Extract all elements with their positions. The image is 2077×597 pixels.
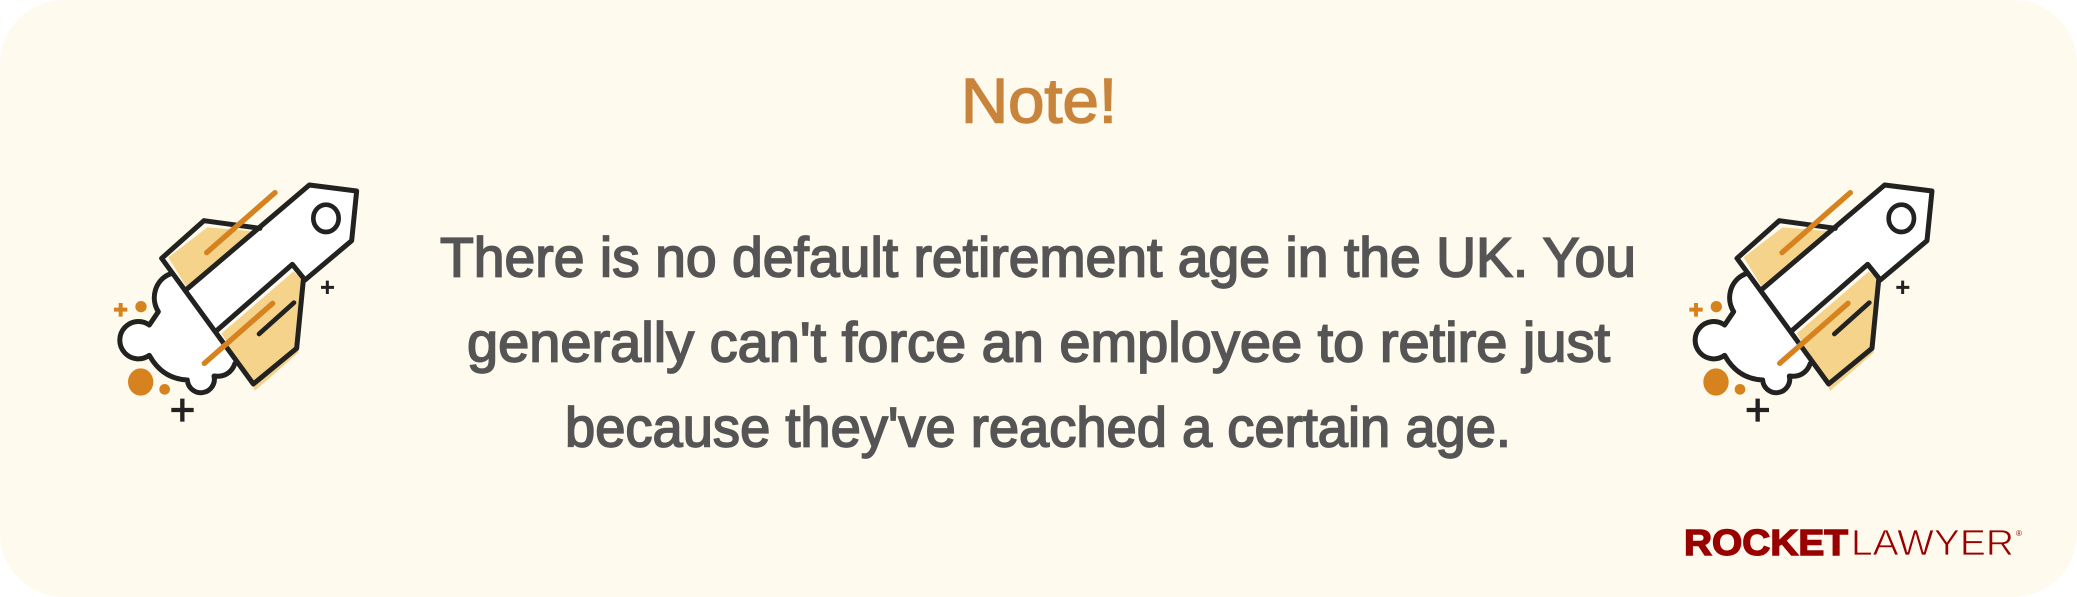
body text: generally can't force an employee to retire just — [467, 311, 1610, 374]
heading: Note! — [961, 67, 1117, 137]
body text — [440, 226, 1636, 459]
body text: There is no default retirement age in the UK. You — [440, 226, 1636, 289]
body text: because they've reached a certain age. — [565, 396, 1511, 459]
logo: Rocket Lawyer — [1684, 522, 2022, 563]
logo: Rocket Lawyer: LAWYER — [1851, 522, 2014, 563]
logo: Rocket Lawyer: ® — [2016, 529, 2022, 538]
logo: Rocket Lawyer: ROCKET — [1684, 522, 1848, 563]
icon: rocket right — [1689, 185, 1932, 422]
icon: rocket left — [114, 185, 357, 422]
